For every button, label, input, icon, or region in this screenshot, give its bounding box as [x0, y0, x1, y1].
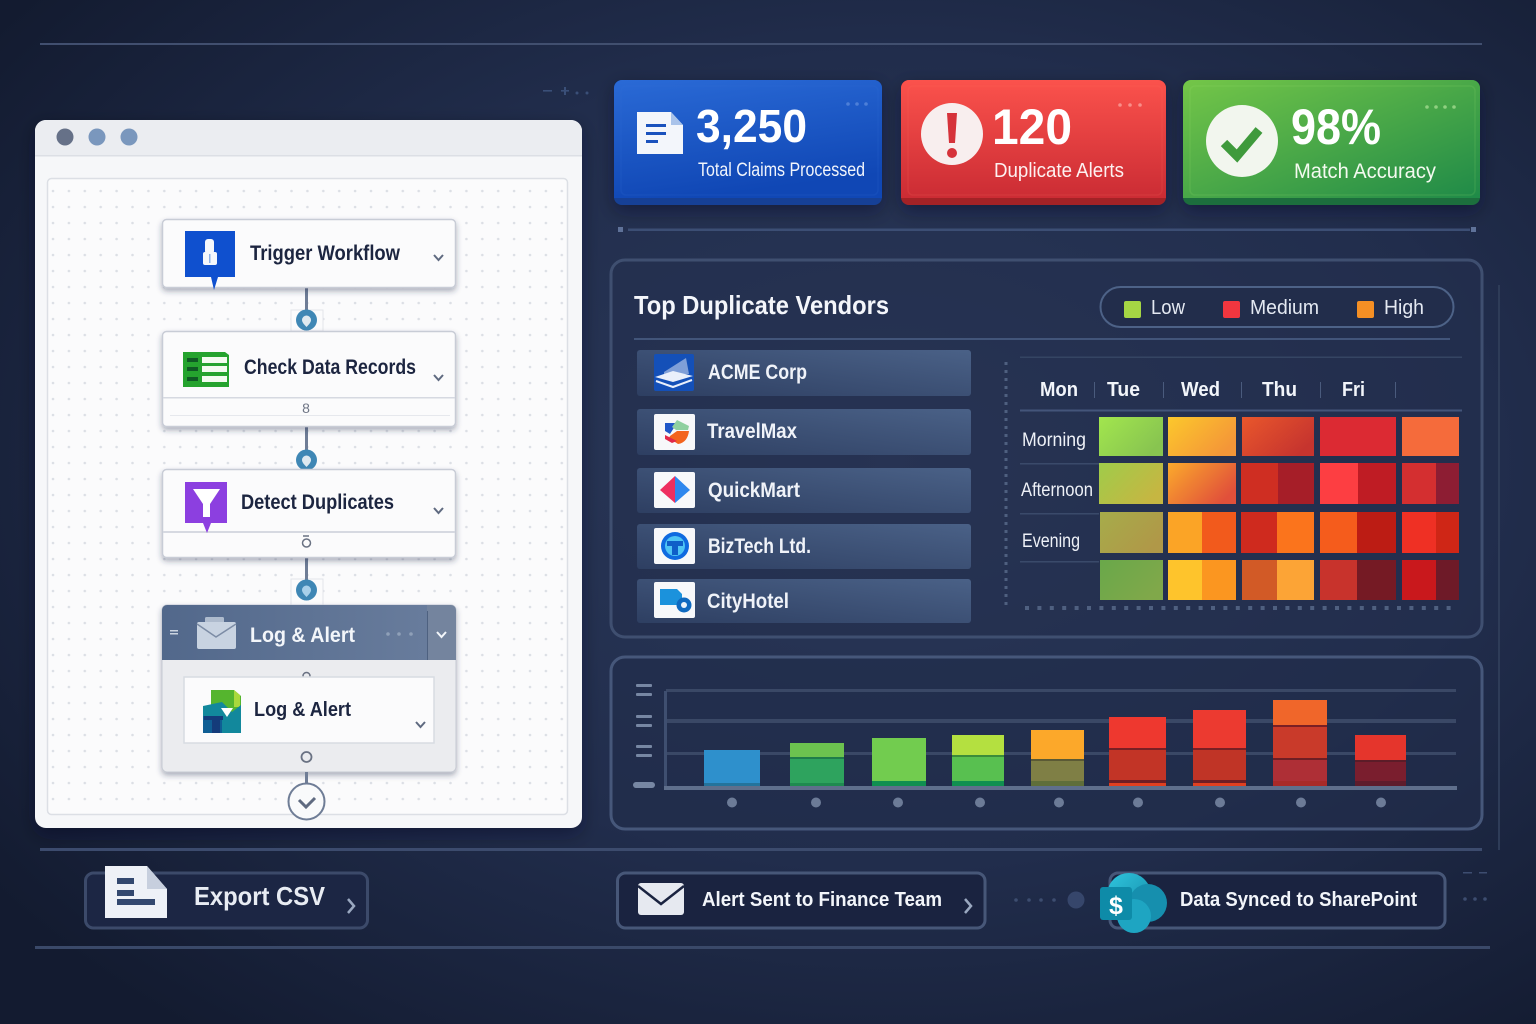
KPI card: duplicate alerts — [901, 80, 1166, 205]
button: SharePoint sync: Data Synced to SharePoint — [1180, 889, 1417, 911]
window title bar — [35, 120, 582, 156]
baseline — [664, 786, 1457, 790]
legend: Low — [1151, 297, 1186, 319]
day labels: Mon — [1040, 379, 1078, 401]
vendor: BizTech Ltd.: BizTech Ltd. — [708, 535, 811, 558]
vendor: CityHotel — [637, 579, 971, 623]
KPI card: duplicate alerts: 120 — [992, 99, 1072, 155]
legend: High — [1384, 297, 1424, 319]
day labels: Wed — [1181, 379, 1220, 401]
row labels: Afternoon — [1021, 480, 1093, 501]
icon: csv file — [105, 866, 167, 918]
panel: top duplicate vendors — [611, 260, 1482, 637]
icon: envelope case — [197, 617, 236, 649]
icon: envelope — [638, 883, 684, 915]
chevron — [348, 899, 354, 913]
grid lines — [666, 689, 1456, 755]
node group: Log & Alert — [162, 605, 456, 772]
footer divider top — [40, 848, 1482, 851]
icon: data sheet — [183, 352, 229, 387]
vendor: QuickMart — [637, 468, 971, 513]
vendor: ACME Corp — [637, 350, 971, 396]
dotted axes — [1004, 362, 1008, 610]
day labels: Tue — [1107, 379, 1140, 401]
chevron — [434, 508, 443, 513]
day labels: Thu — [1262, 379, 1297, 401]
icon: log — [203, 690, 241, 733]
group header: Log & Alert — [250, 624, 355, 647]
decoration: top sparkle marks — [543, 87, 588, 95]
panel: workflow window — [35, 120, 582, 828]
group header — [162, 605, 456, 660]
row labels: Evening — [1022, 531, 1080, 552]
connector dots — [1014, 892, 1084, 908]
chevron — [416, 722, 425, 727]
button: Alert Sent: Alert Sent to Finance Team — [702, 889, 942, 911]
port — [302, 752, 312, 762]
icon: travelmax — [654, 414, 695, 450]
heading: Top Duplicate Vendors — [634, 290, 889, 320]
dotted canvas — [48, 178, 568, 814]
connector 1 — [291, 287, 323, 331]
node: Trigger Workflow — [162, 220, 456, 290]
inner card: Log & Alert — [254, 699, 351, 721]
vendor: QuickMart: QuickMart — [708, 479, 800, 502]
end check node — [288, 772, 324, 820]
port — [303, 672, 310, 680]
KPI card: duplicate alerts: Duplicate Alerts — [994, 160, 1124, 182]
legend: Medium — [1250, 297, 1319, 319]
vendor: ACME Corp: ACME Corp — [708, 361, 807, 384]
icon: SharePoint — [1100, 873, 1167, 933]
node: Trigger Workflow: Trigger Workflow — [250, 242, 401, 265]
window control dots — [56, 128, 138, 146]
icon: trigger — [185, 231, 235, 290]
icon: SharePoint: $ — [1109, 892, 1123, 920]
panel: bar chart — [611, 657, 1482, 829]
KPI card: total claims: Total Claims Processed — [698, 160, 865, 181]
icon: biztech — [654, 528, 695, 564]
button: Export CSV — [86, 866, 368, 928]
KPI card: match accuracy: 98% — [1291, 99, 1381, 155]
heatmap — [1006, 356, 1462, 610]
icon: cityhotel — [654, 582, 695, 618]
button: Alert Sent — [618, 873, 985, 928]
legend — [1100, 287, 1454, 327]
KPI divider — [618, 227, 1476, 232]
chevron — [965, 899, 971, 913]
top divider — [40, 43, 1482, 45]
button: SharePoint sync — [1100, 873, 1445, 933]
vendor: CityHotel: CityHotel — [707, 590, 789, 613]
axis — [633, 684, 667, 788]
node: Detect Duplicates — [162, 470, 456, 558]
chevron — [434, 375, 443, 380]
heatmap cells — [1099, 417, 1459, 600]
icon: acme — [654, 354, 694, 391]
side decorative rule — [1498, 285, 1500, 850]
row labels: Morning — [1022, 430, 1086, 451]
chevron — [434, 255, 443, 260]
icon: alert — [921, 103, 983, 165]
bars — [704, 700, 1406, 787]
icon: document — [637, 112, 683, 154]
vendor: BizTech Ltd. — [637, 524, 971, 569]
inner card — [184, 677, 434, 743]
icon: check — [1206, 105, 1278, 177]
icon: funnel — [185, 482, 227, 533]
chevron — [437, 632, 446, 637]
day labels: Fri — [1342, 379, 1365, 401]
icon: quickmart — [654, 472, 695, 508]
day labels — [1040, 379, 1365, 401]
node: Check Data Records: Check Data Records — [244, 356, 416, 379]
node: Detect Duplicates: Detect Duplicates — [241, 491, 394, 514]
node: Check Data Records: 8 — [302, 400, 310, 416]
node: Check Data Records — [162, 332, 456, 426]
KPI card: match accuracy — [1183, 80, 1480, 205]
connector 3 — [291, 557, 323, 605]
footer divider bottom — [35, 946, 1490, 949]
port — [302, 536, 310, 547]
vendor: TravelMax — [637, 409, 971, 455]
window frame — [35, 120, 582, 828]
vendor: TravelMax: TravelMax — [707, 420, 797, 443]
x-axis dots — [727, 798, 1386, 808]
connector 2 — [296, 426, 317, 470]
row labels — [1021, 430, 1093, 552]
button: Export CSV: Export CSV — [194, 881, 326, 911]
KPI card: match accuracy: Match Accuracy — [1294, 160, 1436, 183]
decoration: right dots — [1463, 872, 1487, 901]
KPI card: total claims: 3,250 — [696, 100, 807, 152]
KPI card: total claims — [614, 80, 882, 205]
